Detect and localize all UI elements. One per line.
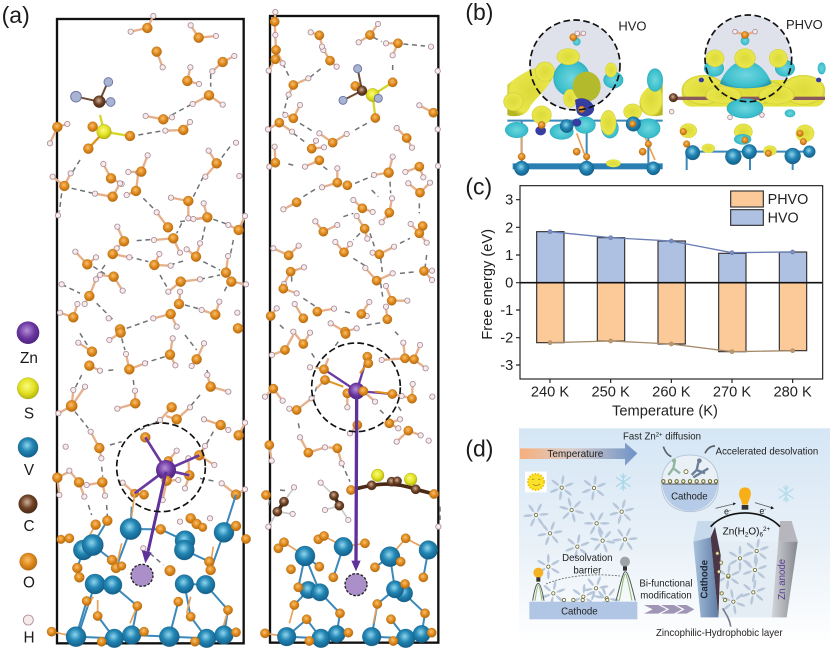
panel c: free energy chart <box>465 173 823 420</box>
oxygen atoms right slab <box>260 531 436 646</box>
hydrated Zn label: 6 <box>759 531 763 538</box>
schematic background <box>519 428 830 643</box>
x axis tick labels: 260 K <box>652 384 691 400</box>
electron labels and arrows: e <box>724 507 729 517</box>
high barrier curve with grey bulb <box>616 557 635 601</box>
magnified cathode lens <box>662 455 718 512</box>
electron labels and arrows: e <box>759 506 764 516</box>
panel label (c): (c) <box>465 173 492 199</box>
Zn ion with coordination and arrow right <box>319 352 397 571</box>
Zn ion with coordination bonds and diffusion arrow <box>135 437 199 563</box>
temperature arrow <box>520 443 637 466</box>
PHVO line with markers <box>548 339 795 354</box>
temperature arrow: Temperature <box>547 449 603 460</box>
Zn legend <box>17 321 39 367</box>
bi-functional modification label: Bi-functional <box>639 579 693 590</box>
x axis tick labels: 270 K <box>713 384 751 400</box>
water molecules upper right cell <box>265 9 441 336</box>
cathode block left <box>529 602 637 619</box>
curved callout arrows <box>663 446 715 457</box>
desolvation barrier text: Desolvation <box>562 553 613 564</box>
V legend: V <box>24 462 35 479</box>
S legend: S <box>24 405 34 422</box>
barrier word: barrier <box>573 565 602 576</box>
chart frame and ticks <box>516 186 823 383</box>
HVO dashed circle <box>530 20 620 110</box>
electron labels and arrows <box>716 502 774 517</box>
hydrated ion stars <box>520 473 641 616</box>
x axis tick labels: 250 K <box>592 384 630 400</box>
y axis tick labels: 2 <box>505 220 513 236</box>
panel a: left HVO simulation cell <box>2 2 251 648</box>
PHVO dashed circle <box>705 15 792 102</box>
HVO charge density <box>503 18 663 176</box>
dashed barrier arrow <box>546 575 620 584</box>
sun icon <box>525 472 547 492</box>
low barrier curve with yellow bulb <box>533 568 544 601</box>
electron labels and arrows: - <box>764 507 766 513</box>
oxygen atoms left slab <box>47 513 251 646</box>
bars HVO <box>537 232 807 283</box>
HVO line with markers <box>548 230 795 255</box>
fast diffusion label: Fast Zn <box>623 432 656 443</box>
x axis tick labels: 280 K <box>774 384 812 400</box>
y axis title: Free energy (eV) <box>480 229 496 340</box>
vanadium atoms right slab <box>277 537 438 648</box>
O legend <box>20 553 37 591</box>
anion: sulfur and CF3 group right <box>339 65 397 123</box>
hydrated Zn label: 2+ <box>763 526 771 533</box>
C legend <box>19 495 37 535</box>
big light bulb <box>739 487 751 510</box>
fast diffusion label: diffusion <box>663 432 701 443</box>
C legend: C <box>23 518 35 535</box>
x axis tick labels: 240 K <box>531 384 569 400</box>
x axis tick labels <box>531 384 812 400</box>
bi-functional modification label: modification <box>640 591 692 602</box>
panel d: schematic <box>465 428 830 643</box>
bars PHVO <box>537 283 807 352</box>
chart legend <box>731 191 808 227</box>
dashed solvation circle right <box>312 343 400 432</box>
external circuit arc <box>711 513 780 527</box>
hydrated Zn label: Zn(H <box>723 526 745 537</box>
panel label (a): (a) <box>2 2 30 28</box>
accelerated desolvation label: Accelerated desolvation <box>716 447 818 458</box>
PHVO label: PHVO <box>786 17 823 32</box>
chevron arrows <box>644 605 694 614</box>
slab bonds left <box>52 493 236 642</box>
V legend <box>18 437 38 479</box>
Zn legend: Zn <box>20 350 38 367</box>
y axis tick labels: 1 <box>505 248 513 264</box>
zincophilic layer label: Zincophilic-Hydrophobic layer <box>656 628 783 639</box>
ions on cathode <box>562 598 609 602</box>
bi-functional modification label <box>639 579 693 602</box>
hydrated Zn label: O) <box>748 526 759 537</box>
snowflake icon small left <box>616 473 631 491</box>
snowflake icon right <box>779 485 793 502</box>
interface ions <box>716 552 730 602</box>
slab bonds right <box>265 536 428 641</box>
water molecules lower right cell <box>260 329 441 648</box>
electron labels and arrows: - <box>729 508 731 514</box>
electrolyte <box>716 542 778 617</box>
y axis tick labels: -3 <box>500 358 513 374</box>
PHVO highlighted circle fill <box>705 15 792 102</box>
adsorbed polymer surface layer <box>261 469 441 529</box>
H legend: H <box>23 630 35 647</box>
panel a: right PHVO simulation cell <box>260 9 441 648</box>
anion: sulfur and CF3 group <box>71 78 135 154</box>
y axis tick labels: 0 <box>505 276 513 292</box>
x axis title: Temperature (K) <box>612 404 718 420</box>
y axis tick labels: -2 <box>500 331 513 347</box>
Zn target site <box>131 564 153 586</box>
battery cell <box>693 521 798 619</box>
zinc anode electrode: Zn anode <box>777 559 788 600</box>
callout arrow to layer <box>723 608 731 627</box>
panel b: charge density maps <box>465 0 826 176</box>
water molecules lower left cell <box>47 328 251 648</box>
panel label (d): (d) <box>465 436 493 462</box>
PHVO charge density <box>669 15 826 170</box>
S legend <box>17 378 39 422</box>
cathode block left: Cathode <box>561 607 598 618</box>
water molecules upper left cell <box>47 13 249 334</box>
Zn target site right <box>345 574 367 596</box>
magnified cathode lens: Cathode <box>671 491 708 502</box>
O legend: O <box>23 574 35 591</box>
vanadium atoms left slab <box>66 518 234 648</box>
chart legend: HVO <box>768 211 799 227</box>
chart legend: PHVO <box>768 192 808 208</box>
hydrated Zn label: 2 <box>745 531 749 538</box>
simulation box right <box>270 16 438 643</box>
y axis tick labels <box>500 193 513 374</box>
HVO label: HVO <box>618 18 646 33</box>
HVO highlighted circle fill <box>530 20 620 110</box>
y axis tick labels: 3 <box>505 193 513 209</box>
zero line <box>520 280 823 285</box>
fast diffusion label: 2+ <box>656 432 663 438</box>
element legend <box>17 321 39 647</box>
H legend <box>23 615 35 647</box>
simulation box left <box>57 19 244 643</box>
y axis tick labels: -1 <box>500 303 513 319</box>
dashed solvation circle <box>117 423 205 512</box>
electrolyte stars <box>716 536 770 619</box>
cathode electrode: Cathode <box>699 559 710 599</box>
